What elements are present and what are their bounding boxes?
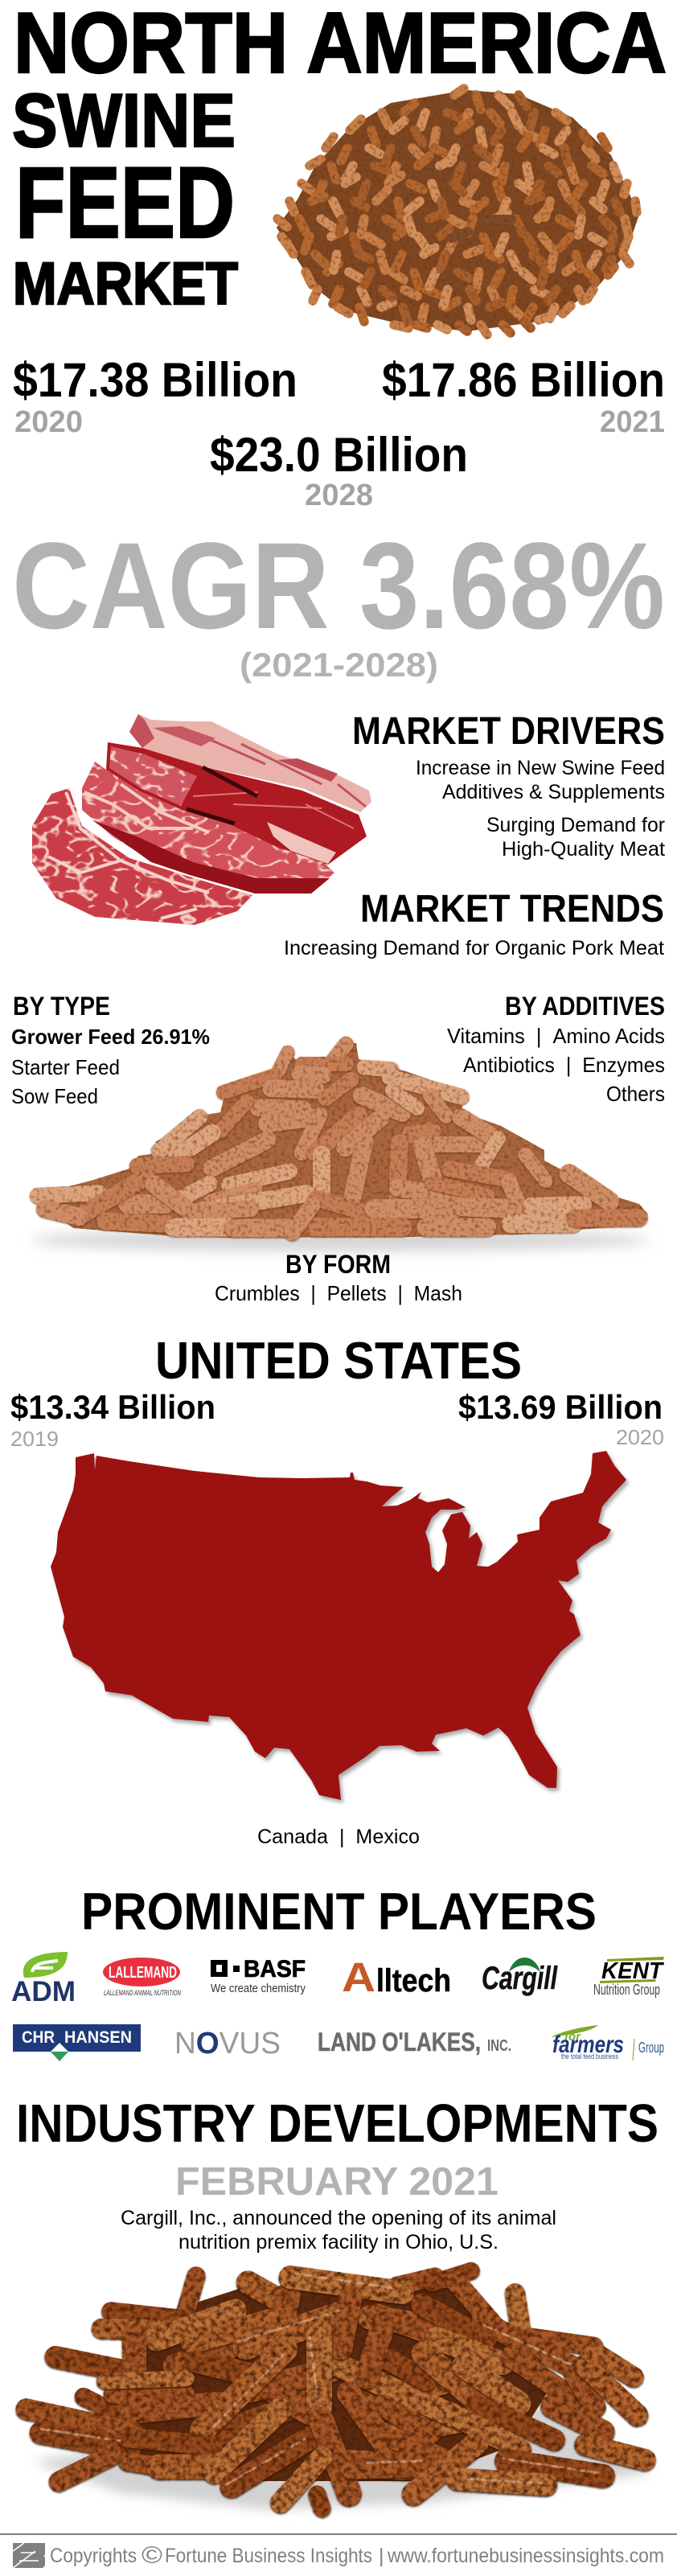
panel: by form: BY FORM	[285, 1250, 391, 1279]
development description	[121, 2207, 556, 2253]
logo: Chr. Hansen	[13, 2024, 141, 2061]
US value 2019: $13.34 Billion	[10, 1388, 215, 1426]
footer	[0, 2533, 677, 2569]
driver: new additives: Increase in New Swine Feed	[416, 757, 665, 779]
logo: Land O'Lakes: INC.	[487, 2037, 511, 2055]
title	[12, 0, 667, 317]
driver: quality meat: High-Quality Meat	[502, 838, 665, 861]
logo: Kent Nutrition Group: KENT	[601, 1958, 664, 1984]
copyright line: ©	[142, 2542, 162, 2569]
logos: prominent players	[11, 1952, 664, 2061]
logo: ForFarmers Group: for	[564, 2030, 581, 2044]
title line: Market: MARKET	[13, 250, 238, 317]
logo: BASF	[211, 1956, 306, 1995]
driver: new additives	[416, 757, 665, 803]
US value 2019: 2019	[10, 1427, 59, 1451]
meat slab: dark red	[106, 742, 367, 865]
copyright line	[50, 2542, 664, 2569]
development description: Cargill, Inc., announced the opening of its animal	[121, 2207, 556, 2229]
panel: by additives: Antibiotics | Enzymes	[463, 1053, 665, 1077]
market value 2028: $23.0 Billion	[210, 428, 468, 482]
panel: by form: Crumbles | Pellets | Mash	[215, 1281, 462, 1305]
driver: quality meat: Surging Demand for	[486, 814, 665, 836]
heading: United States: UNITED STATES	[155, 1331, 522, 1390]
logo: Alltech	[342, 1954, 451, 2000]
market value 2021	[382, 353, 665, 439]
CAGR callout: (2021-2028)	[240, 646, 438, 684]
logo: Land O'Lakes: LAND O'LAKES,	[318, 2028, 481, 2056]
panel: market trends	[284, 888, 664, 959]
map: contiguous United States	[51, 1451, 626, 1800]
image: conical heap of pellets	[31, 1042, 650, 1251]
panel: by additives: Vitamins | Amino Acids	[447, 1024, 665, 1048]
logo: ADM	[11, 1952, 76, 2007]
logo: ForFarmers Group: the total feed business	[561, 2052, 618, 2060]
title line: Feed: FEED	[15, 147, 235, 259]
logo: Alltech: lltech	[376, 1963, 451, 1999]
image: round pile of feed pellets	[277, 88, 639, 335]
meat slab: front	[32, 788, 252, 925]
image: raw pork cuts	[32, 714, 371, 925]
panel: by type: Sow Feed	[11, 1084, 98, 1108]
copyright line: Fortune Business Insights	[165, 2545, 372, 2567]
logo: Lallemand: LALLEMAND	[109, 1964, 177, 1982]
logo: ADM: ADM	[11, 1976, 76, 2007]
logo: BASF: We create chemistry	[211, 1982, 306, 1995]
title line: Swine: SWINE	[12, 78, 236, 162]
US value 2020	[458, 1388, 664, 1449]
market value 2020: $17.38 Billion	[13, 353, 297, 407]
icon: Fortune Business Insights mark	[13, 2543, 45, 2568]
logo: Lallemand	[103, 1958, 181, 1997]
meat slab: marbled middle	[82, 762, 334, 894]
panel: by type	[11, 992, 210, 1108]
logo: ForFarmers Group: farmers	[552, 2032, 624, 2058]
copyright line: Copyrights	[50, 2545, 137, 2567]
logo: Lallemand: LALLEMAND ANIMAL NUTRITION	[104, 1989, 181, 1997]
market value 2028: 2028	[305, 479, 373, 512]
logo: Kent Nutrition Group	[593, 1957, 664, 1998]
image: close-up pile of wood-brown pellets	[18, 2270, 651, 2509]
meat slab: back	[129, 714, 371, 812]
logo: BASF: BASF	[244, 1956, 306, 1982]
development date: FEBRUARY 2021	[175, 2160, 499, 2204]
heading: prominent players: PROMINENT PLAYERS	[81, 1882, 597, 1941]
logo: Chr. Hansen: CHR	[22, 2028, 55, 2047]
other countries: Canada | Mexico	[257, 1826, 420, 1848]
logo: Cargill: Cargill	[482, 1961, 558, 1996]
market value 2020	[13, 353, 297, 439]
market value 2028	[210, 428, 468, 512]
development description: nutrition premix facility in Ohio, U.S.	[178, 2231, 499, 2253]
market value 2021: 2021	[600, 405, 665, 439]
panel: by form	[215, 1250, 462, 1305]
logo: Novus: NOVUS	[174, 2027, 281, 2060]
panel: market drivers	[352, 710, 665, 861]
US value 2019	[10, 1388, 215, 1451]
driver: new additives: Additives & Supplements	[442, 781, 665, 803]
panel: market trends: Increasing Demand for Organic Pork Meat	[284, 937, 664, 959]
US value 2020: $13.69 Billion	[458, 1388, 663, 1426]
market value 2020: 2020	[14, 405, 83, 439]
copyright line: |	[379, 2545, 384, 2567]
panel: by additives	[447, 992, 665, 1106]
panel: by type: Starter Feed	[11, 1055, 120, 1079]
driver: quality meat	[486, 814, 665, 861]
logo: Chr. Hansen: HANSEN	[64, 2028, 132, 2047]
panel: by type: BY TYPE	[13, 992, 110, 1021]
logo: ForFarmers Group	[551, 2025, 664, 2060]
panel: by type: Grower Feed 26.91%	[11, 1025, 210, 1049]
panel: by additives: Others	[606, 1082, 665, 1106]
logo: Alltech: A	[342, 1954, 375, 2000]
US value 2020: 2020	[616, 1425, 664, 1449]
